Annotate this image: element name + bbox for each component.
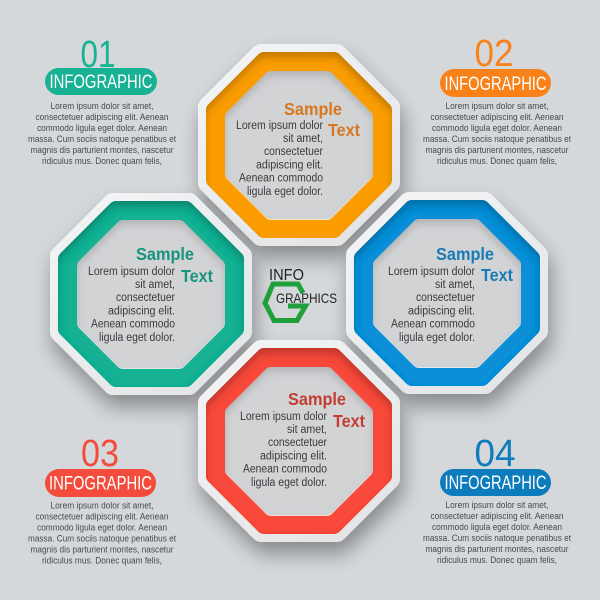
paragraph 04: ridiculus mus. Donec quam felis,	[437, 555, 557, 565]
text: red octagon: Aenean commodo	[243, 464, 327, 476]
paragraph 02: magnis dis parturient montes, nascetur	[426, 145, 568, 155]
text: orange octagon: ligula eget dolor.	[247, 186, 323, 198]
text: teal octagon: Aenean commodo	[91, 318, 175, 330]
text: blue octagon: sit amet,	[435, 279, 475, 291]
text: teal octagon: consectetuer	[116, 292, 175, 304]
icon: green G hexagon	[265, 284, 306, 320]
text: orange octagon: Aenean commodo	[239, 172, 323, 184]
pill label 03: INFOGRAPHIC	[49, 474, 152, 494]
paragraph 01: Lorem ipsum dolor sit amet,	[50, 101, 154, 111]
text: blue octagon: consectetuer	[416, 292, 475, 304]
pill 01	[45, 68, 157, 95]
paragraph 01	[28, 101, 176, 166]
pill 02	[440, 69, 551, 97]
paragraph 03	[28, 500, 176, 566]
text: teal octagon: adipiscing elit.	[108, 306, 175, 318]
text: blue octagon: Text	[481, 265, 513, 285]
text: orange octagon: Text	[328, 120, 360, 140]
text: red octagon: consectetuer	[268, 437, 327, 449]
text: red octagon: ligula eget dolor.	[251, 477, 327, 489]
paragraph 02: massa. Cum sociis natoque penatibus et	[423, 134, 571, 144]
paragraph 04: consectetuer adipiscing elit. Aenean	[430, 511, 564, 521]
paragraph 03: ridiculus mus. Donec quam felis,	[42, 556, 162, 566]
text: orange octagon: adipiscing elit.	[256, 160, 323, 172]
pill label 01: INFOGRAPHIC	[50, 72, 152, 93]
paragraph 01: ridiculus mus. Donec quam felis,	[42, 156, 162, 166]
paragraph 03: commodo ligula eget dolor. Aenean	[37, 522, 167, 532]
paragraph 03: Lorem ipsum dolor sit amet,	[50, 500, 154, 510]
text: blue octagon: Sample	[436, 244, 494, 264]
block 01	[28, 34, 176, 166]
block 04	[423, 433, 571, 565]
paragraph 01: consectetuer adipiscing elit. Aenean	[36, 112, 168, 122]
panel: blue octagon	[356, 202, 541, 396]
logo word: INFO: INFO	[269, 267, 304, 284]
text: blue octagon: adipiscing elit.	[408, 306, 475, 318]
text: teal octagon	[88, 244, 213, 344]
paragraph 02: ridiculus mus. Donec quam felis,	[437, 156, 557, 166]
text: orange octagon: Sample	[284, 99, 342, 119]
paragraph 02: consectetuer adipiscing elit. Aenean	[430, 112, 564, 122]
pill label 04: INFOGRAPHIC	[444, 473, 546, 494]
pill label 02: INFOGRAPHIC	[444, 74, 546, 95]
text: blue octagon: ligula eget dolor.	[399, 332, 475, 344]
panel: red octagon	[208, 350, 393, 544]
number 03: 03	[81, 433, 119, 475]
pill 03	[45, 469, 156, 497]
text: teal octagon: Sample	[136, 244, 194, 264]
paragraph 04: magnis dis parturient montes, nascetur	[426, 544, 568, 554]
number 01: 01	[80, 34, 116, 76]
number 02: 02	[474, 33, 514, 75]
paragraph 03: consectetuer adipiscing elit. Aenean	[36, 512, 168, 522]
block 02	[423, 33, 571, 166]
paragraph 04: massa. Cum sociis natoque penatibus et	[423, 533, 571, 543]
text: teal octagon: ligula eget dolor.	[99, 332, 175, 344]
paragraph 02: Lorem ipsum dolor sit amet,	[446, 101, 548, 111]
text: teal octagon: sit amet,	[135, 279, 175, 291]
paragraph 03: magnis dis parturient montes, nascetur	[30, 544, 174, 554]
paragraph 04	[423, 500, 571, 565]
paragraph 02	[423, 101, 571, 166]
text: red octagon: adipiscing elit.	[260, 450, 327, 462]
paragraph 04: commodo ligula eget dolor. Aenean	[432, 522, 562, 532]
text: red octagon	[240, 389, 365, 489]
paragraph 01: commodo ligula eget dolor. Aenean	[37, 123, 167, 133]
text: blue octagon: Aenean commodo	[391, 318, 475, 330]
text: blue octagon	[388, 244, 513, 344]
paragraph 03: massa. Cum sociis natoque penatibus et	[28, 534, 176, 544]
text: red octagon: sit amet,	[287, 424, 327, 436]
text: blue octagon: Lorem ipsum dolor	[388, 266, 475, 278]
text: orange octagon	[236, 99, 360, 198]
text: orange octagon: consectetuer	[264, 146, 323, 158]
logo word: GRAPHICS: GRAPHICS	[276, 290, 337, 306]
text: red octagon: Lorem ipsum dolor	[240, 411, 327, 423]
panel: teal octagon	[60, 203, 245, 397]
panel: orange octagon	[208, 54, 393, 248]
paragraph 01: massa. Cum sociis natoque penatibus et	[28, 134, 176, 144]
text: red octagon: Sample	[288, 389, 346, 409]
block 03	[28, 433, 176, 566]
text: red octagon: Text	[333, 411, 365, 431]
paragraph 02: commodo ligula eget dolor. Aenean	[432, 123, 562, 133]
center logo	[265, 267, 337, 320]
text: teal octagon: Text	[181, 266, 213, 286]
text: teal octagon: Lorem ipsum dolor	[88, 266, 175, 278]
text: orange octagon: sit amet,	[283, 133, 323, 145]
number 04: 04	[474, 433, 516, 475]
paragraph 01: magnis dis parturient montes, nascetur	[30, 145, 174, 155]
paragraph 04: Lorem ipsum dolor sit amet,	[446, 500, 548, 510]
text: orange octagon: Lorem ipsum dolor	[236, 120, 323, 132]
pill 04	[440, 469, 551, 496]
